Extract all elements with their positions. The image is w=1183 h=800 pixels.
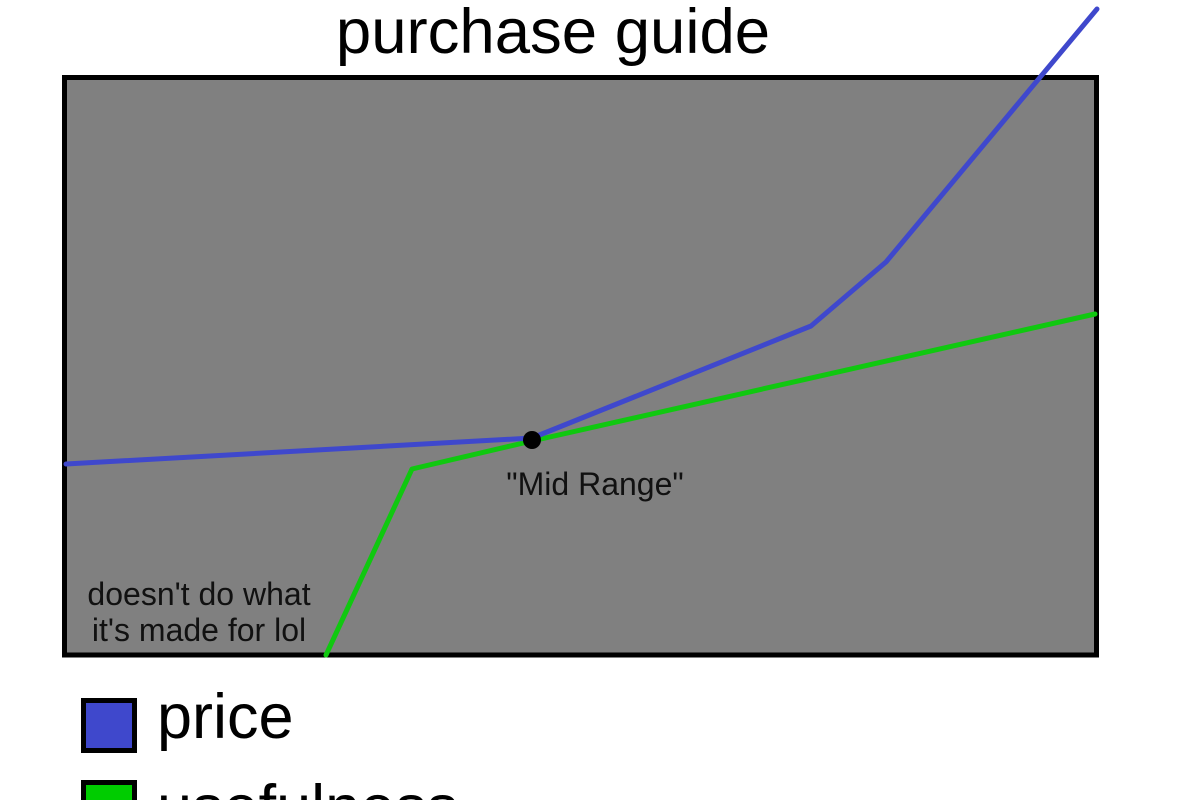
mid range label: "Mid Range" [506, 466, 684, 502]
line: price [66, 9, 1097, 464]
line: usefulness [326, 314, 1095, 655]
legend: price [84, 682, 294, 752]
low end annotation: doesn't do what [87, 576, 311, 612]
mid range point [523, 431, 541, 449]
chart panel [64, 78, 1096, 655]
low end annotation: it's made for lol [92, 612, 306, 648]
low end annotation [87, 576, 311, 648]
legend: price: price [157, 682, 294, 752]
